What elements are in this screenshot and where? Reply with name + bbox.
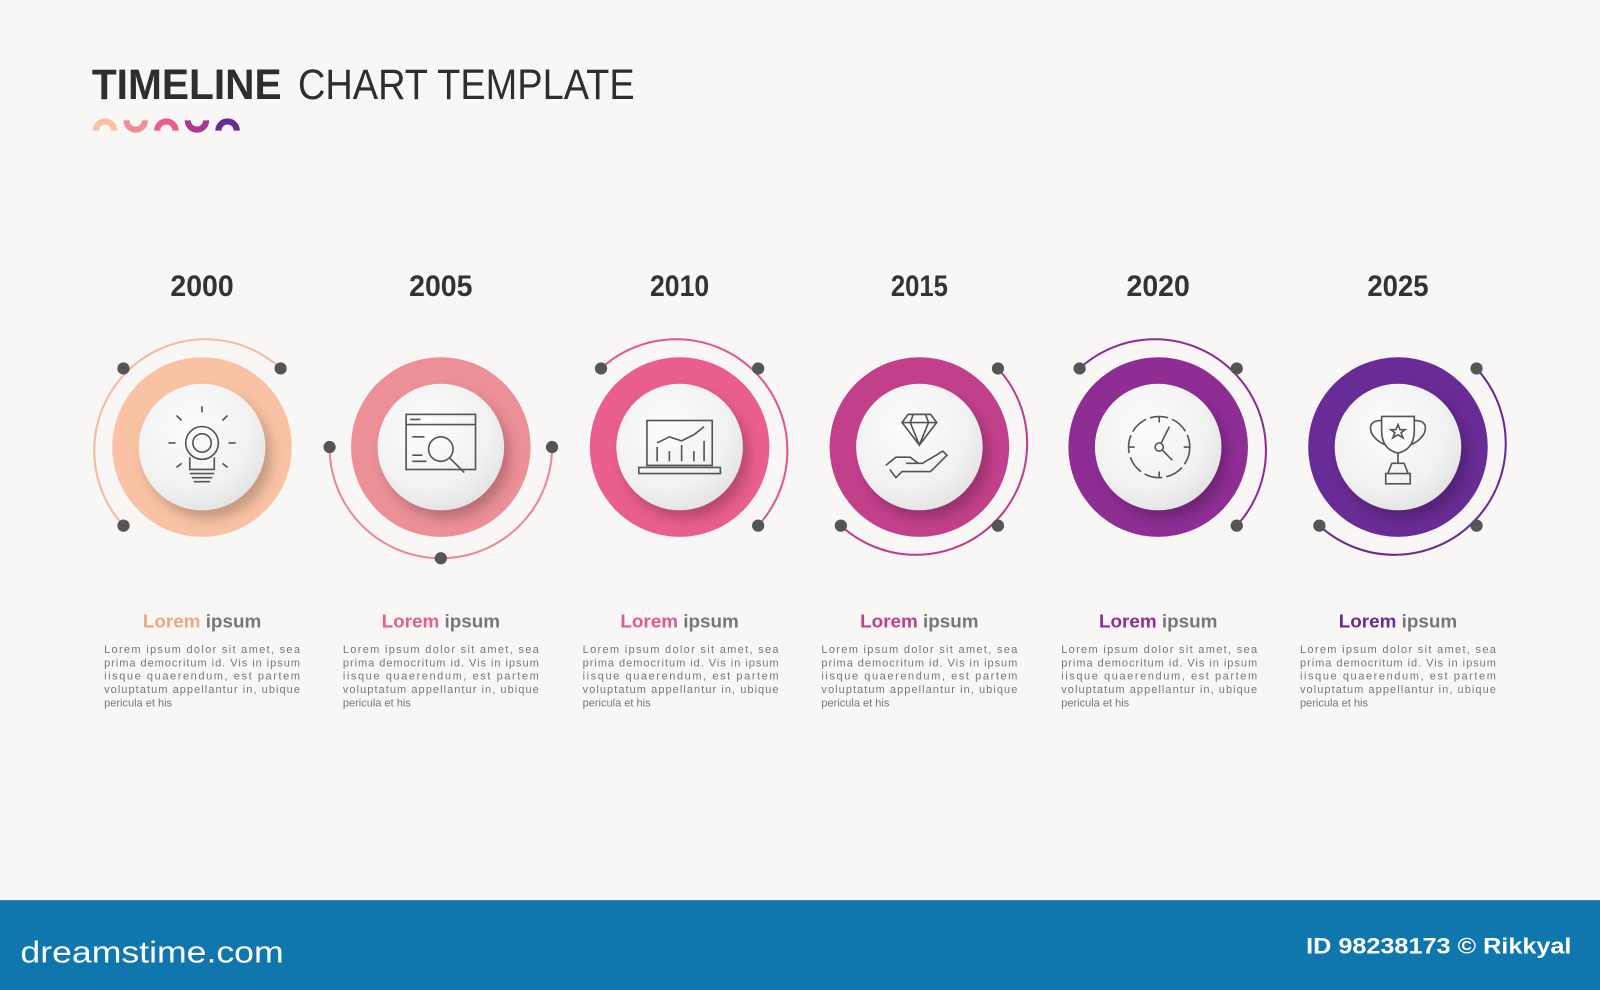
text block 6 [1300,611,1497,709]
text block 3: pericula et his [583,697,651,709]
text block 2: pericula et his [343,697,411,709]
text block 5: Lorem ipsum dolor sit amet, sea [1061,644,1258,656]
text block 1: prima democritum id. Vis in ipsum [104,657,300,669]
icon: bulb gear [168,406,236,482]
year 2020: 2020 [1127,270,1190,303]
text block 4: Lorem ipsum [860,611,979,632]
title [92,61,635,109]
text block 2: prima democritum id. Vis in ipsum [343,657,539,669]
step 5: 2020 [1068,270,1266,537]
text block 4: pericula et his [821,697,890,709]
text block 6: iisque quaerendum, est partem [1300,671,1496,683]
icon: browser search [406,414,476,473]
text block 1: voluptatum appellantur in, ubique [104,684,300,696]
title: TIMELINE [92,61,282,109]
year 2010: 2010 [650,270,709,303]
text block 1: iisque quaerendum, est partem [104,671,300,683]
text block 2: Lorem ipsum [382,611,500,632]
step 4: 2015 [830,270,1027,555]
icon: hand diamond [886,414,947,478]
text block 5 [1061,611,1258,709]
text block 4: iisque quaerendum, est partem [821,671,1017,683]
year 2025: 2025 [1367,270,1429,303]
text block 1: Lorem ipsum [143,611,261,632]
text block 3: iisque quaerendum, est partem [583,671,779,683]
title: CHART TEMPLATE [298,61,635,109]
text block 6: prima democritum id. Vis in ipsum [1300,657,1496,669]
text block 4: voluptatum appellantur in, ubique [821,684,1017,696]
text block 4 [821,611,1018,709]
text block 5: prima democritum id. Vis in ipsum [1061,657,1257,669]
year 2005: 2005 [409,270,472,303]
footer banner: dreamstime.com [20,935,284,969]
text block 6: pericula et his [1300,697,1368,709]
icon: clock [1129,416,1190,478]
step 2: 2005 [323,270,558,564]
text block 2: iisque quaerendum, est partem [343,671,539,683]
text block 6: voluptatum appellantur in, ubique [1300,684,1496,696]
step 6: 2025 [1308,270,1506,555]
text block 5: iisque quaerendum, est partem [1061,671,1257,683]
text block 3: Lorem ipsum dolor sit amet, sea [583,644,779,656]
step 3: 2010 [590,270,787,537]
text block 4: prima democritum id. Vis in ipsum [821,657,1017,669]
step 1: 2000 [94,270,292,537]
year 2015: 2015 [891,270,948,303]
text block 6: Lorem ipsum dolor sit amet, sea [1300,644,1497,656]
footer banner [0,900,1600,990]
text block 4: Lorem ipsum dolor sit amet, sea [821,644,1018,656]
text block 3: voluptatum appellantur in, ubique [583,684,779,696]
text block 5: voluptatum appellantur in, ubique [1061,684,1257,696]
text block 2: Lorem ipsum dolor sit amet, sea [343,644,540,656]
text block 2 [343,611,540,709]
text block 5: pericula et his [1061,697,1130,709]
decorative waves under title [96,120,237,131]
icon: laptop chart [639,420,720,474]
text block 1 [104,611,301,709]
footer banner: ID 98238173 © Rikkyal [1306,933,1571,958]
text block 3: prima democritum id. Vis in ipsum [583,657,779,669]
text block 6: Lorem ipsum [1339,611,1457,632]
text block 1: pericula et his [104,697,173,709]
text block 3: Lorem ipsum [620,611,739,632]
text block 3 [583,611,779,709]
text block 1: Lorem ipsum dolor sit amet, sea [104,644,301,656]
year 2000: 2000 [170,270,234,303]
text block 2: voluptatum appellantur in, ubique [343,684,539,696]
icon: trophy [1371,416,1425,484]
text block 5: Lorem ipsum [1099,611,1217,632]
